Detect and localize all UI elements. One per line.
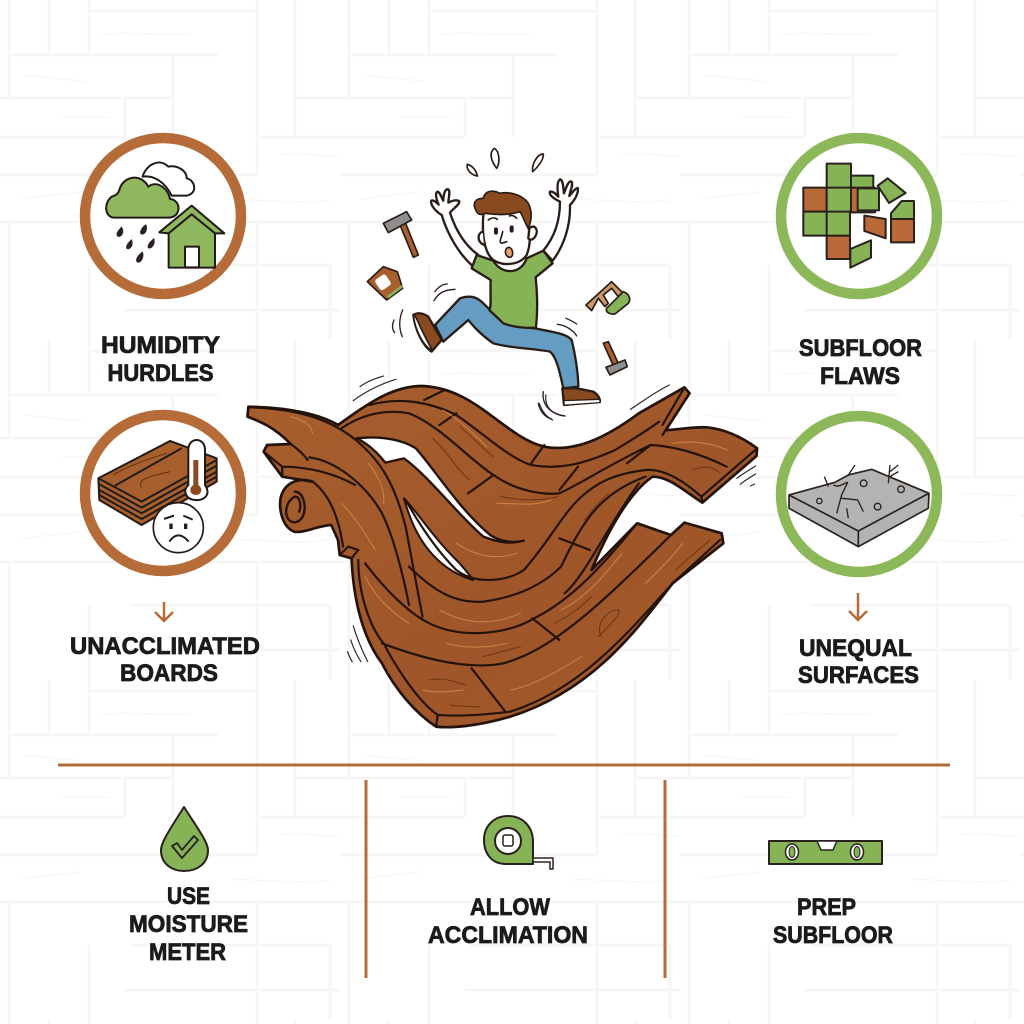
white cloud <box>143 163 194 196</box>
cracks <box>824 465 898 518</box>
green ring <box>781 138 937 294</box>
heading: unacclimated boards <box>70 633 260 687</box>
sad face <box>153 503 203 553</box>
right arm <box>543 179 578 261</box>
slab edges <box>789 493 929 547</box>
thermometer fluid <box>190 460 201 495</box>
concrete slab <box>789 469 929 547</box>
warped wood floor planks <box>247 376 757 727</box>
left vial bubble <box>789 846 795 858</box>
tip: use moisture meter: MOISTURE <box>129 911 248 938</box>
tape blade <box>533 858 553 869</box>
plank seams and outlines <box>247 387 757 727</box>
hammer left <box>400 222 418 257</box>
panel: humidity hurdles icon <box>85 138 241 294</box>
tip: use moisture meter <box>129 883 248 966</box>
pit 2 <box>898 486 904 493</box>
brown tiles <box>803 188 914 259</box>
tape hole <box>374 273 392 291</box>
board grain <box>113 453 170 488</box>
right shoe sole <box>564 399 600 405</box>
pits <box>860 480 867 487</box>
tape measure tool <box>367 267 403 300</box>
left shoe sole <box>413 315 433 351</box>
motion lines <box>393 284 577 419</box>
heading: unequal surfaces: UNEQUAL <box>799 635 912 662</box>
house roof <box>159 206 224 233</box>
heading: unequal surfaces: SURFACES <box>798 662 919 689</box>
tape hub <box>495 828 521 854</box>
rain drops <box>117 224 155 263</box>
white gaps between planks <box>357 437 524 543</box>
head <box>483 207 530 264</box>
tip: prep subfloor: PREP <box>797 894 856 921</box>
sweat drops <box>467 148 543 176</box>
tip: allow acclimation: ACCLIMATION <box>428 922 588 949</box>
hair <box>474 191 531 228</box>
tip: allow acclimation <box>428 894 588 949</box>
tip: use moisture meter: METER <box>149 939 226 966</box>
icon: spirit level <box>769 841 882 864</box>
heading: subfloor flaws: FLAWS <box>820 363 900 390</box>
tape centre <box>503 835 513 846</box>
panel: unacclimated boards icon <box>85 415 241 571</box>
heading: unacclimated boards: UNACCLIMATED <box>70 633 260 660</box>
panel: unequal surfaces icon <box>781 416 937 572</box>
tip: prep subfloor: SUBFLOOR <box>773 922 893 949</box>
top vial <box>817 841 837 850</box>
sad face features <box>164 516 193 542</box>
ears <box>479 227 537 245</box>
hammer right head <box>606 360 627 375</box>
arrow: down left <box>155 602 173 621</box>
icon: moisture drop <box>161 807 208 871</box>
green cloud <box>106 178 179 218</box>
left vial <box>786 844 798 860</box>
falling man with tools <box>367 148 630 419</box>
face features <box>488 215 517 243</box>
vertical divider left <box>364 780 368 978</box>
heading: humidity hurdles <box>101 332 220 387</box>
tape green accent <box>388 287 402 297</box>
horizontal divider <box>58 764 950 766</box>
t-shirt <box>472 251 553 328</box>
vertical divider right <box>664 780 666 978</box>
eyes <box>496 227 512 233</box>
check mark <box>172 836 198 858</box>
heading: unacclimated boards: BOARDS <box>120 660 218 687</box>
hammer head <box>383 212 412 233</box>
right shoe <box>562 388 600 405</box>
tip: prep subfloor <box>773 894 893 949</box>
right vial <box>850 844 864 860</box>
green tiles <box>803 164 914 268</box>
scroll curl <box>286 492 305 522</box>
heading: humidity hurdles: HUMIDITY <box>101 332 220 359</box>
house <box>169 211 215 268</box>
wood grain highlights <box>291 410 727 692</box>
heading: subfloor flaws <box>799 335 922 390</box>
icon: tape measure <box>484 816 553 869</box>
board layers <box>98 448 217 519</box>
motion lines around planks <box>347 376 755 662</box>
hammer right <box>603 342 618 366</box>
thermometer <box>185 440 207 500</box>
sad eyes <box>171 524 186 529</box>
heading: unequal surfaces <box>798 635 919 689</box>
left shoe <box>413 313 442 352</box>
right vial bubble <box>854 846 860 858</box>
plank silhouette <box>247 386 757 727</box>
tip: use moisture meter: USE <box>167 883 210 910</box>
brown ring <box>85 415 241 571</box>
house door <box>185 247 199 267</box>
green grip <box>606 292 630 314</box>
mouth <box>505 247 513 257</box>
pit 4 <box>817 498 822 504</box>
tip: allow acclimation: ALLOW <box>470 894 551 921</box>
arrow: down right <box>849 593 867 620</box>
left arm <box>431 189 478 267</box>
green ring <box>781 416 937 572</box>
heading: subfloor flaws: SUBFLOOR <box>799 335 922 362</box>
stacked boards <box>98 441 217 525</box>
brown ring <box>85 138 241 294</box>
angle tool <box>586 282 623 311</box>
jeans <box>435 297 578 388</box>
heading: humidity hurdles: HURDLES <box>108 360 214 387</box>
pit 3 <box>874 503 881 510</box>
panel: subfloor flaws icon <box>781 138 937 294</box>
